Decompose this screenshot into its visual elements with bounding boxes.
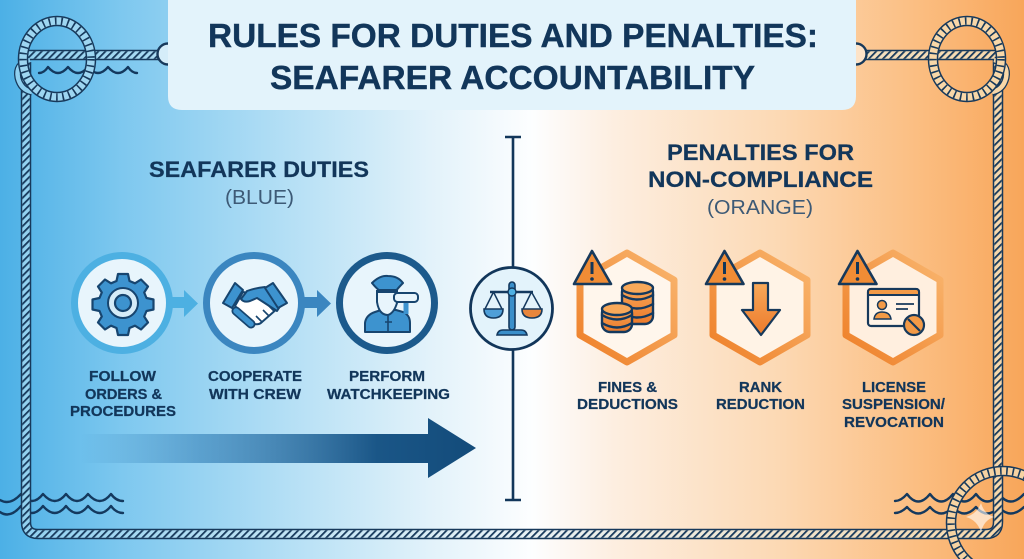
heading: penalties (648, 140, 873, 219)
label: rank reduction: RANK (739, 380, 783, 396)
label: fines: DEDUCTIONS (577, 397, 678, 413)
label: cooperate: WITH CREW (209, 387, 301, 403)
heading: penalties: (ORANGE) (707, 197, 813, 219)
waves: bottom left (0, 494, 123, 514)
icon: warning triangle (706, 251, 744, 284)
waves: bottom right (895, 494, 1024, 514)
rope knot: top left (18, 21, 91, 97)
step 3: watchkeeping (327, 256, 450, 403)
title (208, 17, 818, 96)
title: SEAFARER ACCOUNTABILITY (270, 59, 755, 96)
label: watchkeeping (327, 369, 450, 403)
heading: seafarer duties: (BLUE) (225, 187, 294, 209)
icon: warning triangle (574, 251, 611, 284)
icon: warning triangle (839, 251, 876, 284)
penalty 1: fines (574, 251, 678, 413)
big progress arrow (80, 418, 476, 478)
icon: handshake in circle (206, 256, 302, 350)
label: license (842, 380, 945, 431)
label: license: SUSPENSION/ (842, 397, 945, 413)
divider line (505, 137, 521, 500)
label: cooperate (208, 369, 302, 403)
arrow: step 2 to 3 (300, 290, 331, 317)
icon: officer with spyglass in circle (340, 256, 434, 350)
label: follow orders: ORDERS & (85, 387, 163, 403)
heading: penalties: PENALTIES FOR (667, 140, 854, 165)
label: rank reduction (716, 380, 805, 413)
label: rank reduction: REDUCTION (716, 397, 805, 413)
icon: hexagon with coins (580, 253, 674, 362)
rope end caps (158, 44, 866, 64)
step 1: follow orders (70, 256, 198, 420)
title: RULES FOR DUTIES AND PENALTIES: (208, 17, 818, 54)
label: cooperate: COOPERATE (208, 369, 302, 385)
label: fines: FINES & (598, 380, 658, 396)
title panel (168, 0, 856, 110)
rope knot: top right (933, 21, 1006, 97)
label: license: REVOCATION (844, 415, 944, 431)
rope knot: bottom right (951, 471, 1024, 559)
label: fines (577, 380, 678, 413)
icon: gear in circle (74, 256, 170, 350)
icon: hexagon with ID card (846, 253, 940, 362)
label: follow orders (70, 369, 176, 420)
heading: seafarer duties (149, 157, 369, 209)
label: follow orders: PROCEDURES (70, 404, 176, 420)
label: watchkeeping: PERFORM (349, 369, 425, 385)
step 2: cooperate (206, 256, 331, 403)
waves: top left (39, 67, 137, 73)
label: watchkeeping: WATCHKEEPING (327, 387, 450, 403)
arrow: step 1 to 2 (170, 290, 198, 317)
scales emblem (470, 268, 552, 350)
icon: hexagon with down arrow (713, 253, 807, 362)
heading: seafarer duties: SEAFARER DUTIES (149, 157, 369, 182)
sparkle mark (966, 503, 994, 532)
heading: penalties: NON-COMPLIANCE (648, 167, 873, 192)
label: license: LICENSE (862, 380, 926, 396)
penalty 3: license (839, 251, 945, 431)
label: follow orders: FOLLOW (89, 369, 156, 385)
penalty 2: rank reduction (706, 251, 807, 413)
